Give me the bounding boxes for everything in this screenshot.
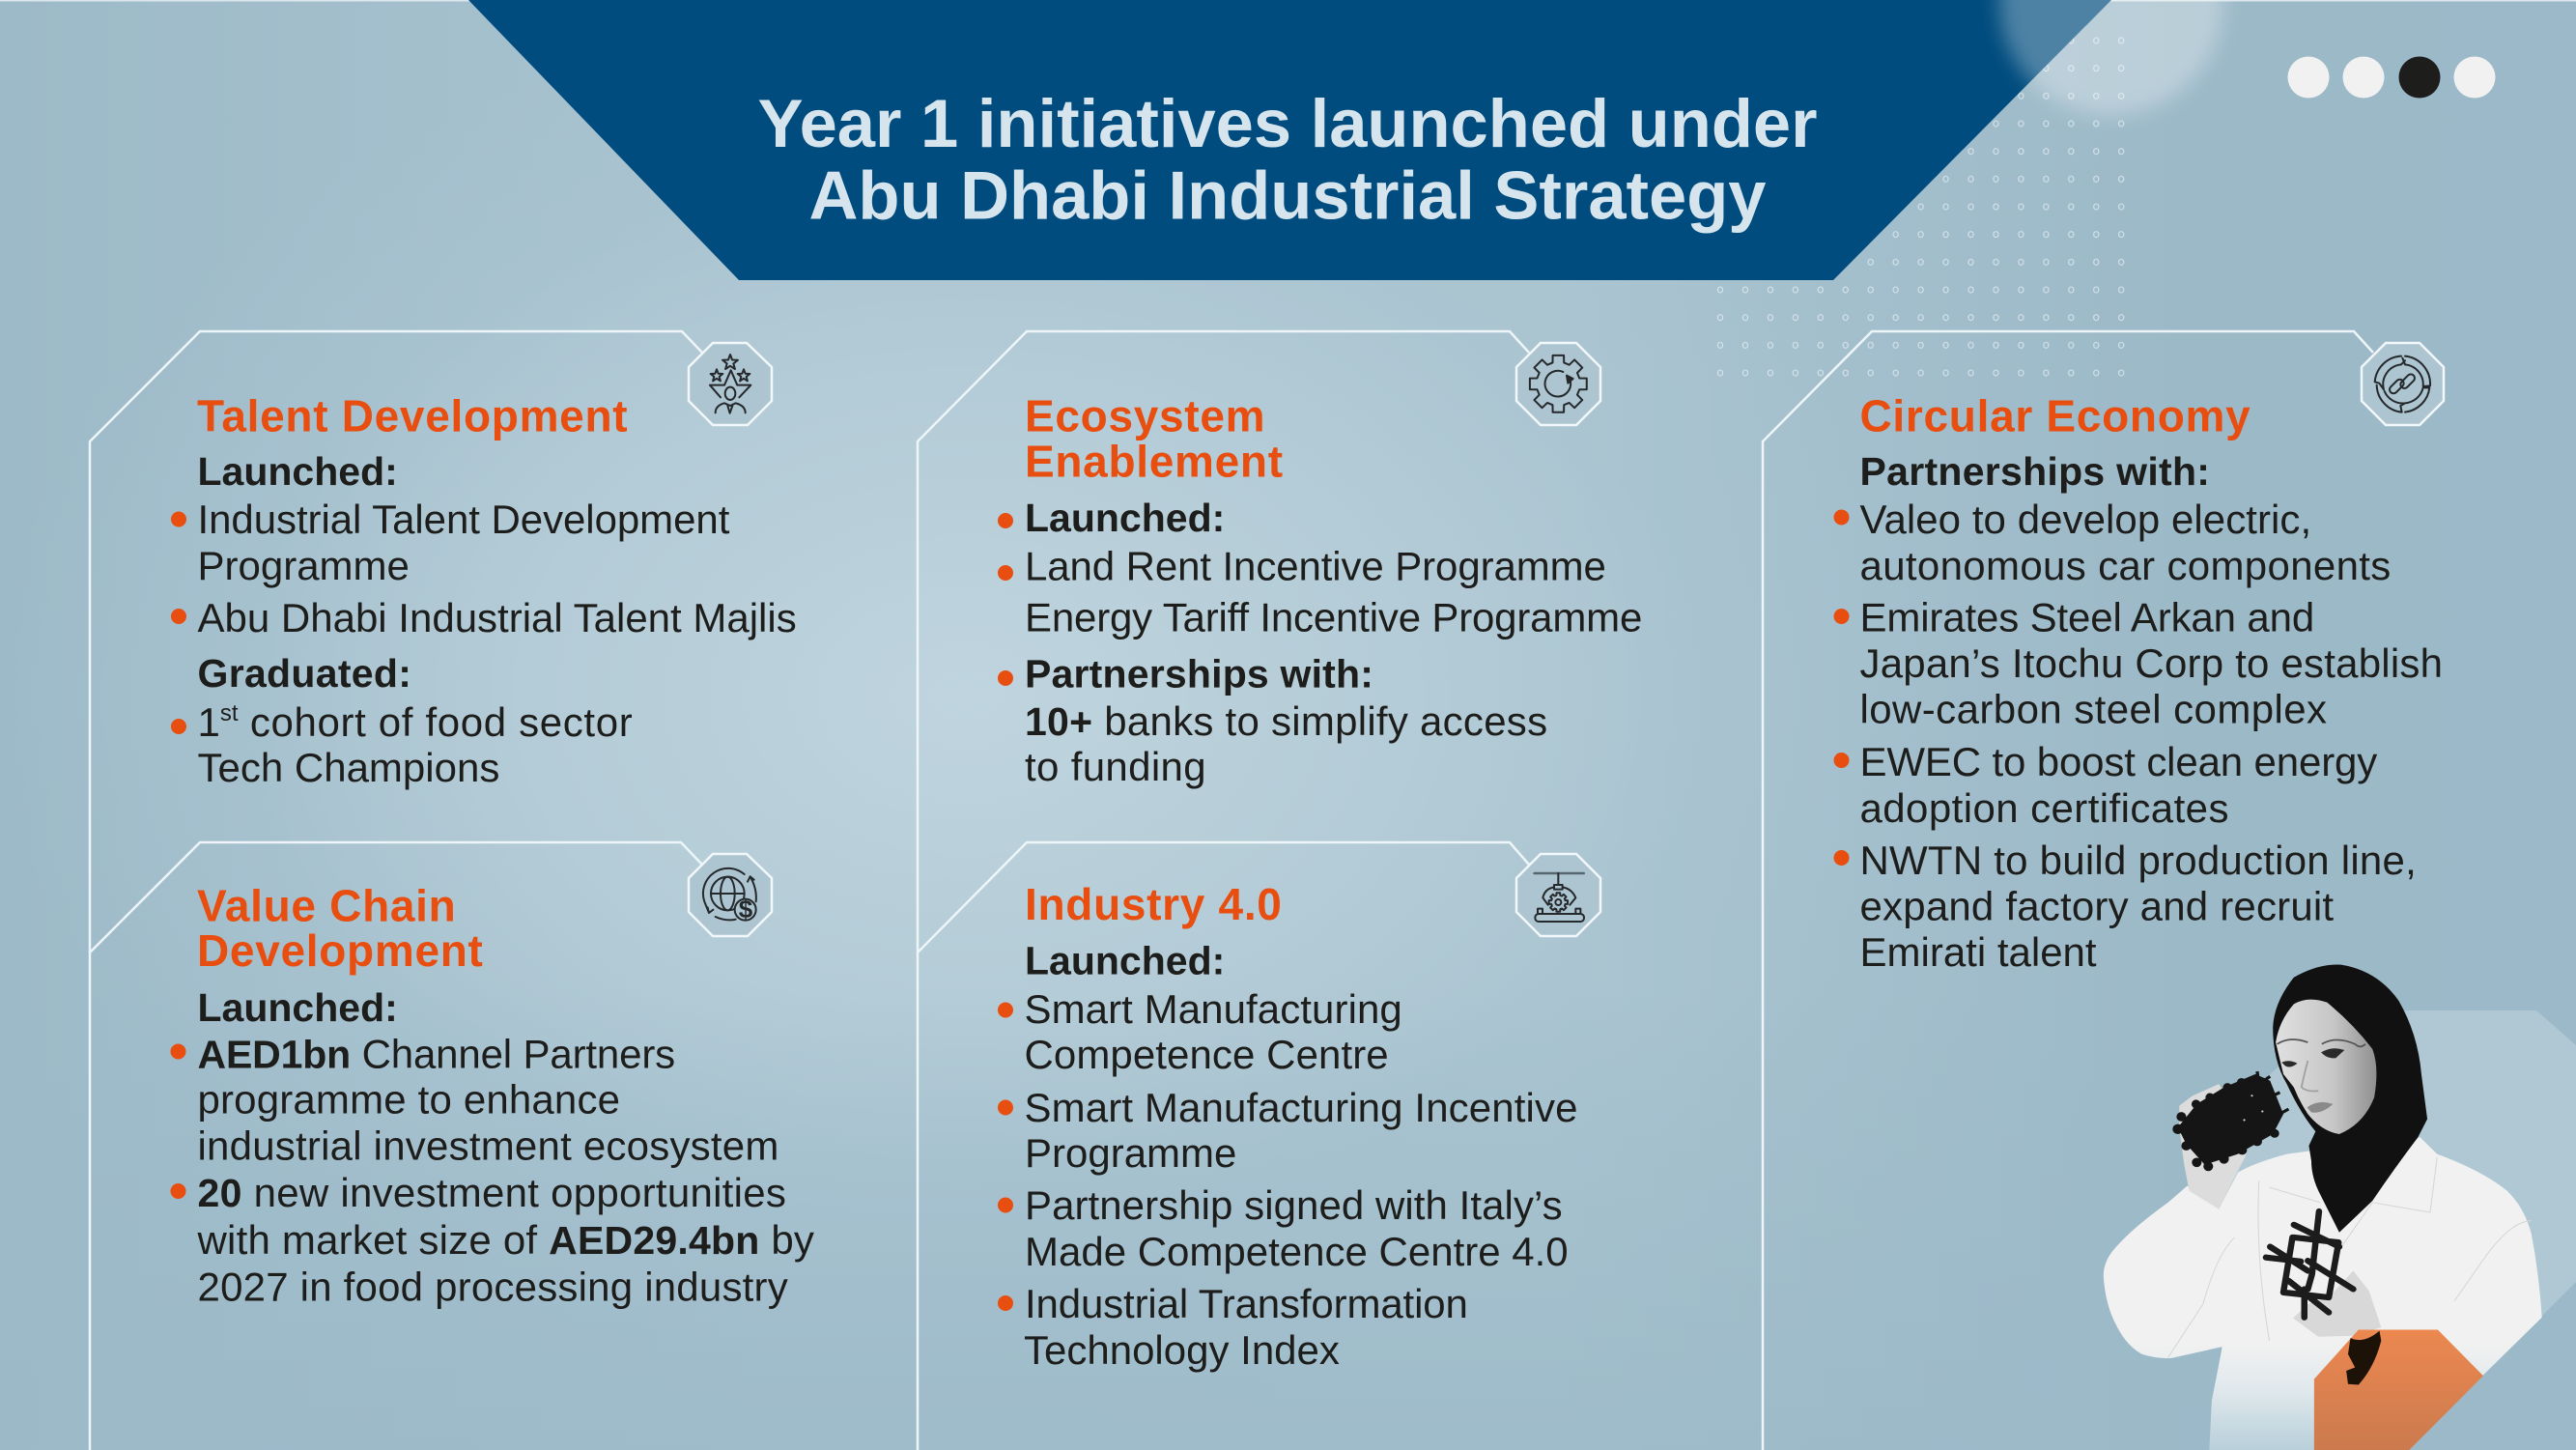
heading: Enablement [1025, 437, 1284, 487]
text: graduated: cohort of food sector [239, 699, 633, 745]
text: partnerships: Partnerships with: [1025, 651, 1373, 696]
title banner [468, 0, 2111, 280]
text: launched: Launched: [1025, 496, 1225, 540]
text: partnerships: to funding [1025, 744, 1206, 789]
text: launched: Industrial Talent Development [197, 497, 730, 542]
text: partnerships: 10+ banks to simplify access [1025, 698, 1547, 744]
dot grid pattern [1708, 27, 2134, 386]
panel: talent development [90, 331, 797, 952]
text: partnerships list: EWEC to boost clean energy [1860, 739, 2377, 784]
text: launched list: Industrial Transformation [1025, 1281, 1468, 1326]
icon: globe with dollar [689, 854, 772, 936]
lab coat [2104, 1137, 2542, 1450]
text: partnerships [998, 651, 1547, 789]
text: launched list: Launched: [1025, 939, 1225, 983]
text: partnerships list: low-carbon steel complex [1860, 686, 2327, 732]
text: launched: with market size of AED29.4bn by [197, 1217, 814, 1263]
icon: robotic claw with gear [1516, 854, 1600, 936]
text: graduated: Tech Champions [197, 745, 499, 790]
title: Year 1 initiatives launched under [757, 85, 1818, 161]
text: launched: AED1bn Channel Partners [197, 1032, 675, 1076]
text: launched: 20 new investment opportunities [197, 1170, 786, 1215]
text: partnerships list: Partnerships with: [1860, 449, 2210, 494]
text: launched list: Technology Index [1024, 1327, 1340, 1373]
heading: Talent Development [197, 390, 628, 441]
icon: gear with cycle arrow [1516, 343, 1600, 425]
text: partnerships list: NWTN to build production line, [1860, 838, 2417, 883]
text: graduated: st [220, 700, 239, 726]
text: launched: industrial investment ecosystem [197, 1123, 779, 1169]
heading: Ecosystem [1025, 390, 1265, 441]
text: graduated: Graduated: [197, 651, 411, 696]
text: launched [170, 985, 814, 1310]
coat folds [2168, 1157, 2532, 1357]
text: launched: Launched: [197, 985, 398, 1030]
pagination dots [2287, 56, 2496, 99]
orange shape [2314, 1330, 2483, 1450]
face [2276, 1000, 2376, 1134]
open lattice object [2266, 1211, 2353, 1318]
heading: Circular Economy [1860, 390, 2250, 441]
panel: circular economy [1763, 331, 2444, 1450]
heading: Value Chain [197, 881, 456, 931]
shadow under hand through orange [2346, 1331, 2381, 1384]
text: launched: Energy Tariff Incentive Programme [1025, 595, 1642, 640]
text: launched: programme to enhance [197, 1076, 620, 1123]
text: launched: Launched: [197, 449, 398, 494]
text: launched list: Partnership signed with Italy’s [1025, 1182, 1563, 1228]
lower hand [2293, 1270, 2381, 1337]
text: partnerships list: expand factory and recruit [1860, 883, 2334, 929]
text: launched: Abu Dhabi Industrial Talent Majlis [197, 595, 797, 640]
icon: circular chain [2362, 343, 2444, 425]
text: partnerships list: Emirati talent [1860, 929, 2097, 975]
text: launched [998, 496, 1642, 640]
panel: value chain development [90, 842, 814, 1450]
text: launched list: Competence Centre [1024, 1032, 1389, 1077]
text: graduated: 1 [197, 699, 220, 745]
text: graduated [171, 651, 633, 790]
text: launched list: Smart Manufacturing [1024, 986, 1402, 1032]
icon: stars and person [689, 343, 772, 425]
text: partnerships list: adoption certificates [1860, 785, 2229, 831]
text: launched: Programme [197, 543, 410, 588]
text: launched [171, 449, 797, 640]
text: partnerships list: autonomous car components [1860, 543, 2392, 588]
title: Abu Dhabi Industrial Strategy [808, 156, 1767, 234]
text: launched list: Programme [1025, 1130, 1236, 1176]
hijab [2273, 965, 2427, 1233]
text: launched list: Smart Manufacturing Incentive [1024, 1085, 1578, 1130]
photo: woman in lab coat holding lattice objects [2104, 965, 2542, 1450]
dense lattice object [2172, 1071, 2288, 1171]
text: partnerships list: Japan’s Itochu Corp to establish [1860, 640, 2443, 686]
text: launched list [998, 939, 1578, 1373]
icon: globe with dollar: $ [739, 895, 753, 924]
text: partnerships list: Emirates Steel Arkan and [1860, 595, 2314, 640]
panel: industry 4.0 [918, 842, 1600, 1450]
heading: Development [197, 925, 484, 976]
text: launched list: Made Competence Centre 4.0 [1025, 1229, 1569, 1274]
text: launched: 2027 in food processing industry [197, 1264, 788, 1310]
facial features [2278, 1039, 2365, 1046]
heading: Industry 4.0 [1025, 879, 1283, 929]
pale octagon backdrop behind photo [2222, 1010, 2576, 1450]
text: partnerships list: Valeo to develop electric, [1860, 497, 2311, 542]
top edge highlight [0, 0, 2576, 2]
panel: ecosystem enablement [918, 331, 1642, 952]
text: launched: Land Rent Incentive Programme [1025, 543, 1606, 589]
text: partnerships list [1833, 449, 2443, 975]
soft glow circle [1999, 0, 2223, 115]
raised hand [2179, 1084, 2251, 1209]
